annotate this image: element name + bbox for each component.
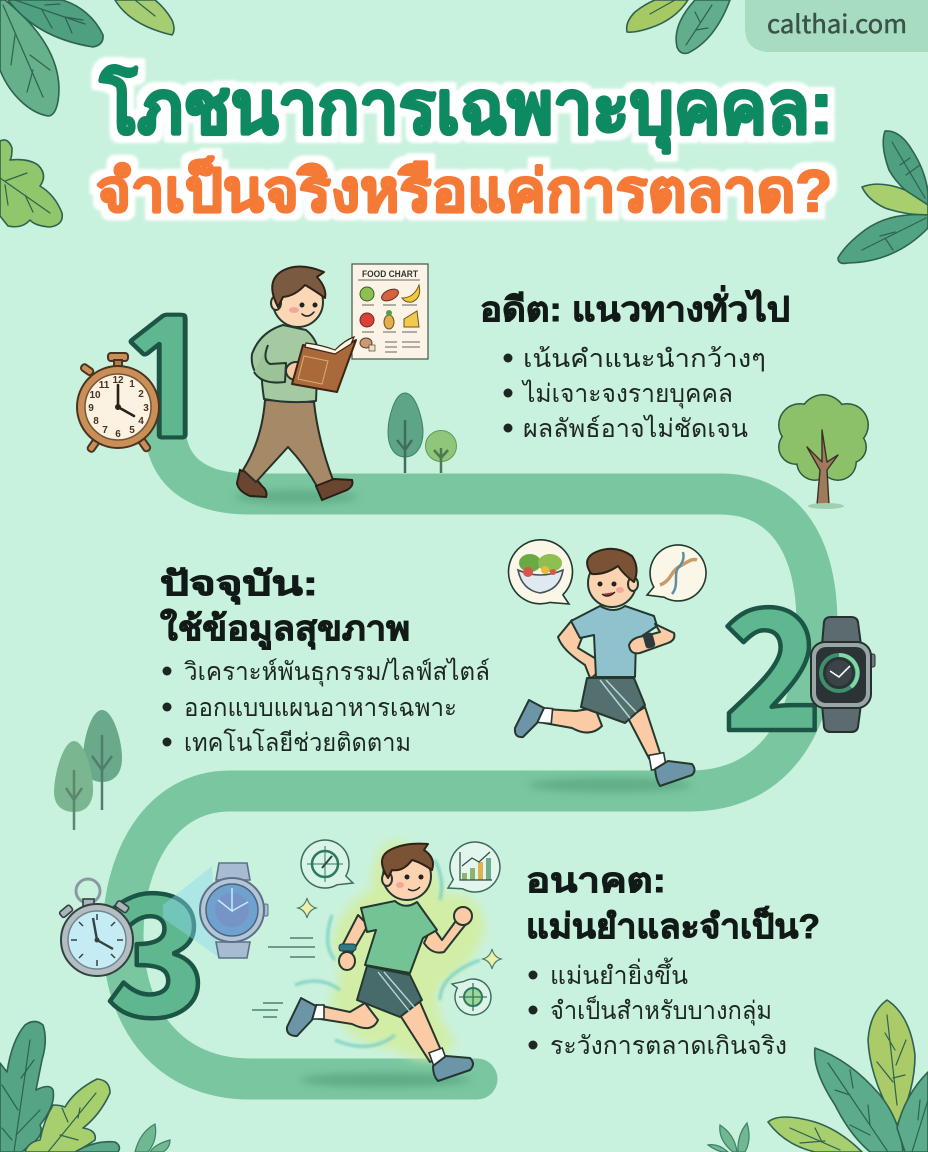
back arm: [340, 915, 368, 953]
runner 3: [252, 840, 501, 1087]
leaves: top right: [627, 0, 730, 53]
head: [588, 559, 636, 607]
back shoe: [287, 998, 316, 1036]
icon: alarm clock: 8: [93, 416, 99, 427]
icon: alarm clock: 4: [138, 416, 144, 427]
heading: ใช้ข้อมูลสุขภาพ: [160, 608, 410, 650]
bullets: เน้นคำแนะนำกว้างๆ: [523, 345, 766, 373]
icon: alarm clock: [77, 353, 159, 453]
bullets: ออกแบบแผนอาหารเฉพาะ: [184, 694, 457, 722]
icon: alarm clock: 9: [88, 403, 94, 414]
number 2: 2: [722, 537, 823, 778]
energy aura: [330, 840, 485, 1060]
title: จำเป็นจริงหรือแค่การตลาด?: [96, 156, 832, 224]
icon: alarm clock: 12: [112, 375, 124, 386]
icon: hologram watch: [163, 863, 268, 958]
bullets: [528, 957, 787, 1060]
bullets: ระวังการตลาดเกินจริง: [550, 1032, 787, 1060]
runner 2: [509, 540, 706, 792]
icon: smartwatch: [811, 617, 875, 732]
forward arm and fist: [629, 624, 674, 653]
icon: alarm clock: 10: [89, 390, 101, 401]
sleeve: [254, 345, 286, 383]
bullets: [162, 657, 490, 757]
sweater: [252, 325, 318, 402]
bullets: แม่นยำยิ่งขึ้น: [550, 957, 688, 990]
trousers: [243, 400, 333, 488]
bullets: ไม่เจาะจงรายบุคคล: [521, 379, 733, 409]
site tab: calthai.com: [767, 5, 907, 41]
site tab: [745, 0, 928, 52]
trees: left: [54, 710, 122, 830]
front shoe: [433, 1056, 473, 1081]
shirt: [571, 606, 657, 677]
back leg: [314, 1003, 378, 1028]
title: โภชนาการเฉพาะบุคคล:: [99, 64, 833, 154]
food chart: [352, 264, 428, 359]
heading: แม่นยำและจำเป็น?: [526, 905, 820, 946]
bullets: ผลลัพธ์อาจไม่ชัดเจน: [523, 414, 748, 443]
trees: middle: [388, 393, 456, 473]
icon: stopwatch: [59, 879, 133, 976]
fist: [454, 907, 472, 925]
front leg: [398, 1002, 443, 1062]
back leg: [544, 708, 602, 733]
shirt: [361, 901, 437, 973]
speed lines: [252, 938, 315, 1017]
winding path: [123, 425, 817, 1079]
icon: alarm clock: 5: [129, 425, 135, 436]
icon: alarm clock: 6: [115, 429, 121, 440]
sparkles: [298, 898, 501, 969]
book: [292, 340, 356, 392]
heading: ปัจจุบัน:: [160, 565, 318, 605]
head: [383, 852, 431, 900]
icon: alarm clock: 11: [99, 380, 110, 391]
hand: [286, 362, 306, 380]
speech bubble: DNA: [647, 545, 706, 601]
wrist watch: [642, 632, 656, 649]
icon: alarm clock: 3: [143, 403, 149, 414]
gauge bubble: [301, 840, 353, 888]
shadow: [234, 490, 358, 504]
bullets: เทคโนโลยีช่วยติดตาม: [184, 728, 411, 757]
front shoe: [655, 761, 694, 786]
back shoe: [237, 470, 266, 497]
back shoe: [515, 700, 544, 737]
heading: [526, 862, 820, 946]
heading: อดีต: แนวทางทั่วไป: [480, 285, 790, 329]
section 1 text: [480, 285, 790, 443]
leaves: right: [838, 131, 928, 263]
food chart: FOOD CHART: [362, 269, 418, 280]
heading: [160, 565, 410, 650]
icon: alarm clock: 7: [102, 425, 108, 436]
bullets: [504, 345, 766, 443]
title: [96, 64, 833, 224]
shorts: [581, 678, 645, 723]
forward arm: [424, 918, 466, 953]
speech bubble: salad: [509, 540, 573, 604]
chart bubble: [448, 842, 500, 892]
back fist: [339, 952, 355, 970]
bullets: วิเคราะห์พันธุกรรม/ไลฟ์สไตล์: [184, 657, 490, 687]
target bubble: [452, 979, 491, 1015]
shadow: [528, 778, 692, 792]
hair: [382, 844, 433, 878]
tree: right: [778, 394, 869, 509]
front shoe: [316, 479, 352, 500]
leaves: top left: [0, 0, 174, 116]
icon: alarm clock: 1: [129, 379, 135, 390]
shadow: [300, 1073, 470, 1087]
icon: alarm clock: 2: [138, 389, 144, 400]
heading: อนาคต:: [526, 862, 666, 900]
leaf: left lime: [0, 140, 62, 227]
person reading: [234, 264, 428, 504]
section 3 text: [526, 862, 820, 1060]
hair: [587, 549, 637, 582]
section 2 text: [160, 565, 490, 757]
head: [273, 277, 323, 327]
number 1: 1: [111, 303, 226, 461]
hair: [272, 266, 325, 307]
leaves: bottom right: [708, 1000, 928, 1152]
back arm: [558, 620, 598, 678]
front leg: [628, 707, 663, 768]
leaves: bottom left: [0, 1022, 170, 1152]
bullets: จำเป็นสำหรับบางกลุ่ม: [550, 995, 772, 1026]
number 3: 3: [106, 823, 207, 1064]
wrist watch: [339, 944, 356, 951]
shorts: [357, 966, 422, 1017]
